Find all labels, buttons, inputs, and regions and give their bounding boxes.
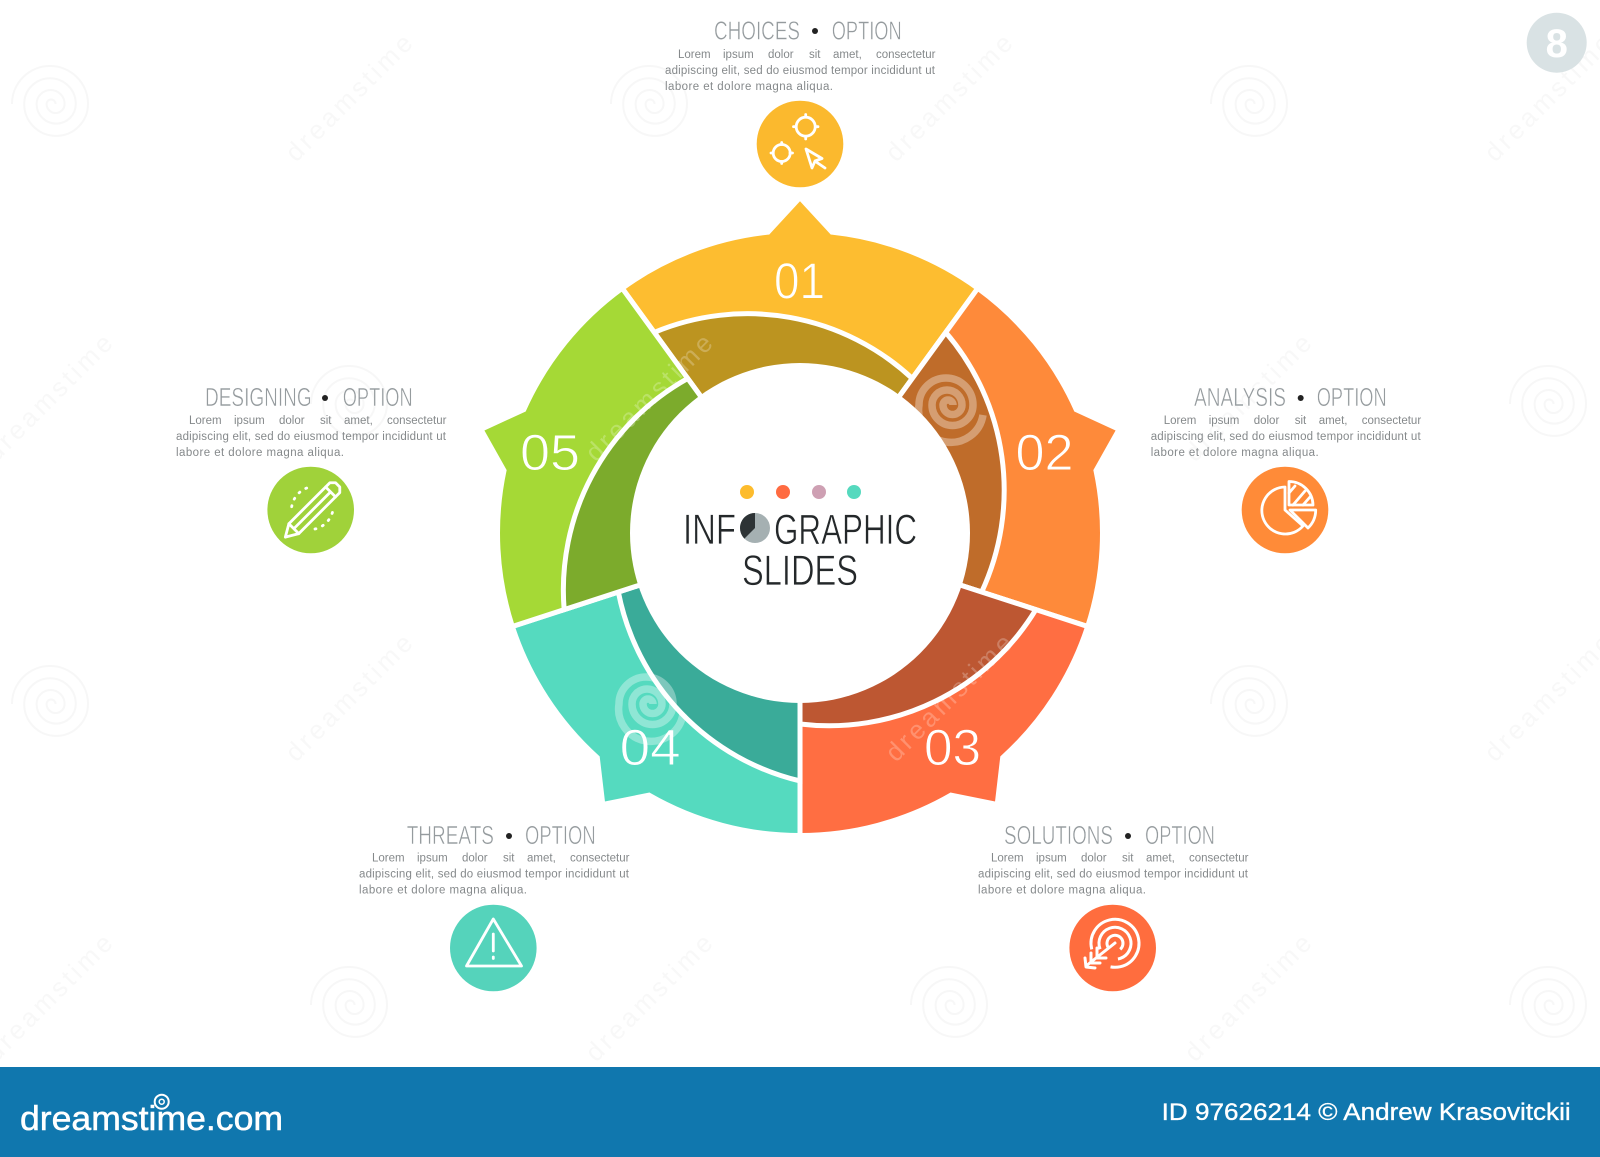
- body text: labore et dolore magna aliqua.: [978, 885, 1146, 897]
- body text: ipsum: [1209, 415, 1239, 427]
- icon: pie chart: [1242, 467, 1328, 553]
- body text: Lorem: [678, 49, 711, 61]
- body text: sit: [1295, 415, 1307, 427]
- background watermark: dreamstime: [579, 328, 718, 467]
- watermark overlay on ring: dreamstime: [879, 628, 1018, 767]
- body text: labore et dolore magna aliqua.: [665, 81, 833, 93]
- background watermark: dreamstime: [879, 28, 1018, 167]
- heading: [714, 17, 902, 45]
- body text: sit: [503, 853, 515, 865]
- heading: [1194, 384, 1387, 412]
- number 01: 01: [774, 253, 825, 310]
- body text: sit: [809, 49, 821, 61]
- background watermark: dreamstime: [579, 928, 718, 1067]
- body text: adipiscing elit, sed do eiusmod tempor incididunt ut: [665, 65, 936, 77]
- heading: OPTION: [1145, 822, 1215, 850]
- heading: OPTION: [832, 17, 902, 45]
- body text: amet,: [527, 853, 556, 865]
- body text: consectetur: [1362, 415, 1421, 427]
- ring diagram: [426, 198, 1174, 909]
- body text: sit: [1122, 853, 1134, 865]
- body text: consectetur: [387, 415, 447, 427]
- body text: [1151, 415, 1421, 459]
- callout: choices: [665, 17, 936, 187]
- segment 01: [622, 198, 978, 400]
- body text: dolor: [279, 415, 305, 427]
- body text: labore et dolore magna aliqua.: [1151, 447, 1319, 459]
- body text: consectetur: [1189, 853, 1249, 865]
- body text: [176, 415, 447, 459]
- number 04: 04: [620, 719, 681, 776]
- body text: ipsum: [417, 853, 448, 865]
- body text: labore et dolore magna aliqua.: [359, 885, 527, 897]
- body text: adipiscing elit, sed do eiusmod tempor incididunt ut: [176, 431, 447, 443]
- heading: OPTION: [1317, 384, 1387, 412]
- segment 02: [872, 260, 1174, 661]
- body text: consectetur: [876, 49, 936, 61]
- centre title: [683, 485, 917, 595]
- body text: amet,: [1319, 415, 1347, 427]
- heading: THREATS: [407, 822, 494, 850]
- body text: adipiscing elit, sed do eiusmod tempor incididunt ut: [978, 869, 1249, 881]
- body text: labore et dolore magna aliqua.: [176, 447, 344, 459]
- heading: DESIGNING: [205, 384, 312, 412]
- callout: solutions: [978, 822, 1249, 991]
- body text: adipiscing elit, sed do eiusmod tempor incididunt ut: [359, 869, 630, 881]
- number 02: 02: [1016, 424, 1074, 481]
- number 03: 03: [924, 719, 981, 776]
- title line 2: SLIDES: [742, 547, 858, 595]
- heading: [205, 384, 413, 412]
- heading: [1004, 822, 1215, 850]
- body text: Lorem: [189, 415, 222, 427]
- heading: OPTION: [343, 384, 413, 412]
- body text: amet,: [1146, 853, 1175, 865]
- icon: targets and cursor: [757, 101, 843, 187]
- background watermark: dreamstime: [279, 628, 418, 767]
- icon: target and arrow: [1069, 905, 1156, 991]
- title line 1: INF: [683, 506, 736, 554]
- icon: pencil: [267, 467, 354, 553]
- body text: dolor: [462, 853, 488, 865]
- body text: adipiscing elit, sed do eiusmod tempor incididunt ut: [1151, 431, 1421, 443]
- background watermark: dreamstime: [1178, 928, 1317, 1067]
- callout: threats: [359, 822, 630, 991]
- callout: designing: [176, 384, 447, 553]
- body text: amet,: [833, 49, 862, 61]
- segment 05: [426, 260, 728, 661]
- background watermark: dreamstime: [1178, 328, 1317, 467]
- body text: dolor: [1254, 415, 1279, 427]
- watermark overlay on ring: [579, 328, 1018, 767]
- segment 03: [735, 536, 1141, 909]
- page number badge: [1527, 13, 1587, 73]
- background watermark: dreamstime: [279, 28, 418, 167]
- footer logo: dreamstime.com: [20, 1100, 283, 1138]
- body text: [359, 853, 630, 897]
- body text: [978, 853, 1249, 897]
- title line 1: GRAPHIC: [774, 506, 917, 554]
- heading: CHOICES: [714, 17, 800, 45]
- icon: warning triangle: [450, 905, 537, 991]
- body text: Lorem: [1164, 415, 1196, 427]
- body text: dolor: [768, 49, 794, 61]
- image credit: ID 97626214 © Andrew Krasovitckii: [1162, 1100, 1571, 1126]
- body text: amet,: [344, 415, 373, 427]
- centre circle: [630, 363, 970, 703]
- body text: Lorem: [372, 853, 405, 865]
- body text: ipsum: [1036, 853, 1067, 865]
- background watermark: dreamstime: [879, 628, 1018, 767]
- watermark overlay on ring: dreamstime: [579, 328, 718, 467]
- callout: analysis: [1151, 384, 1421, 553]
- page number badge: 8: [1546, 22, 1568, 66]
- heading: [407, 822, 596, 850]
- body text: dolor: [1081, 853, 1107, 865]
- title line 1: [683, 506, 917, 554]
- colour dots: [740, 485, 861, 499]
- footer bar: [0, 1067, 1600, 1157]
- body text: Lorem: [991, 853, 1024, 865]
- heading: SOLUTIONS: [1004, 822, 1113, 850]
- number 05: 05: [520, 424, 580, 481]
- heading: OPTION: [525, 822, 596, 850]
- segment 04: [459, 536, 865, 909]
- body text: consectetur: [570, 853, 630, 865]
- body text: sit: [320, 415, 332, 427]
- body text: [665, 49, 936, 93]
- body text: ipsum: [234, 415, 265, 427]
- body text: ipsum: [723, 49, 754, 61]
- heading: ANALYSIS: [1194, 384, 1286, 412]
